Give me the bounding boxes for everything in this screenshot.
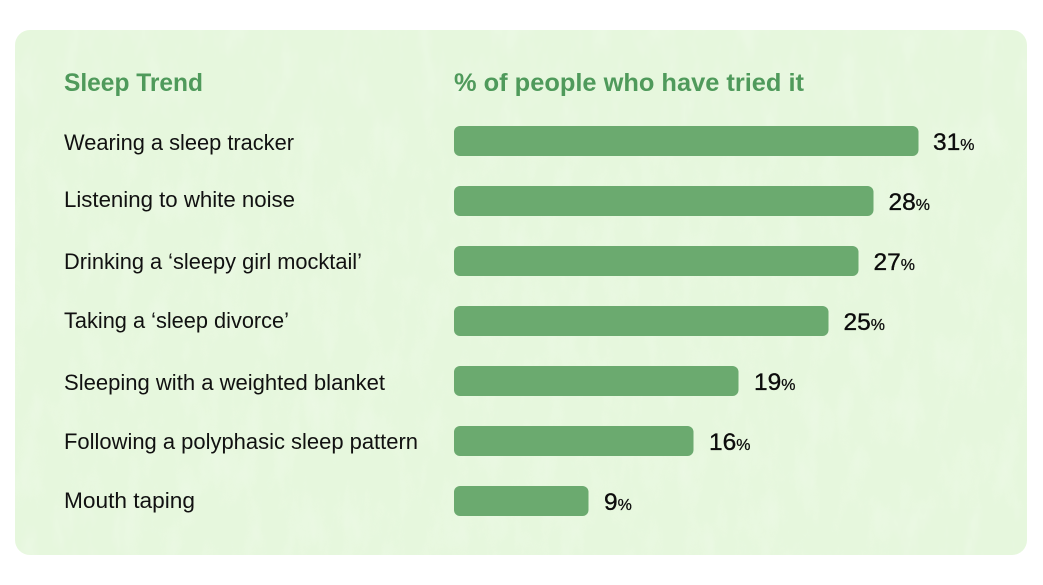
- row: wearing a sleep tracker: [64, 126, 974, 156]
- row: taking a sleep divorce: Taking a ‘sleep divorce’: [64, 308, 289, 333]
- row: listening to white noise: Listening to white noise: [64, 187, 295, 212]
- row: listening to white noise: 28%: [888, 189, 930, 216]
- row: following a polyphasic sleep pattern: Following a polyphasic sleep pattern: [64, 429, 418, 454]
- row: mouth taping: Mouth taping: [64, 488, 195, 513]
- row: drinking a sleepy girl mocktail: Drinking a ‘sleepy girl mocktail’: [64, 249, 362, 274]
- row: taking a sleep divorce: 25%: [844, 309, 885, 336]
- heading: sleep trend: Sleep Trend: [64, 69, 203, 97]
- row: listening to white noise: [64, 186, 930, 216]
- row: mouth taping: [64, 486, 632, 516]
- row: wearing a sleep tracker: 31%: [933, 129, 974, 156]
- row: wearing a sleep tracker: Wearing a sleep tracker: [64, 130, 294, 155]
- row: taking a sleep divorce: [64, 306, 885, 336]
- row: sleeping with a weighted blanket: [64, 366, 796, 396]
- row: drinking a sleepy girl mocktail: [64, 246, 915, 276]
- row: following a polyphasic sleep pattern: 16%: [709, 429, 750, 456]
- row: sleeping with a weighted blanket: Sleeping with a weighted blanket: [64, 370, 386, 395]
- row: sleeping with a weighted blanket: 19%: [754, 369, 796, 396]
- row: drinking a sleepy girl mocktail: 27%: [874, 249, 915, 276]
- heading: percent of people: % of people who have tried it: [454, 69, 805, 97]
- row: mouth taping: 9%: [604, 489, 632, 516]
- row: following a polyphasic sleep pattern: [64, 426, 750, 456]
